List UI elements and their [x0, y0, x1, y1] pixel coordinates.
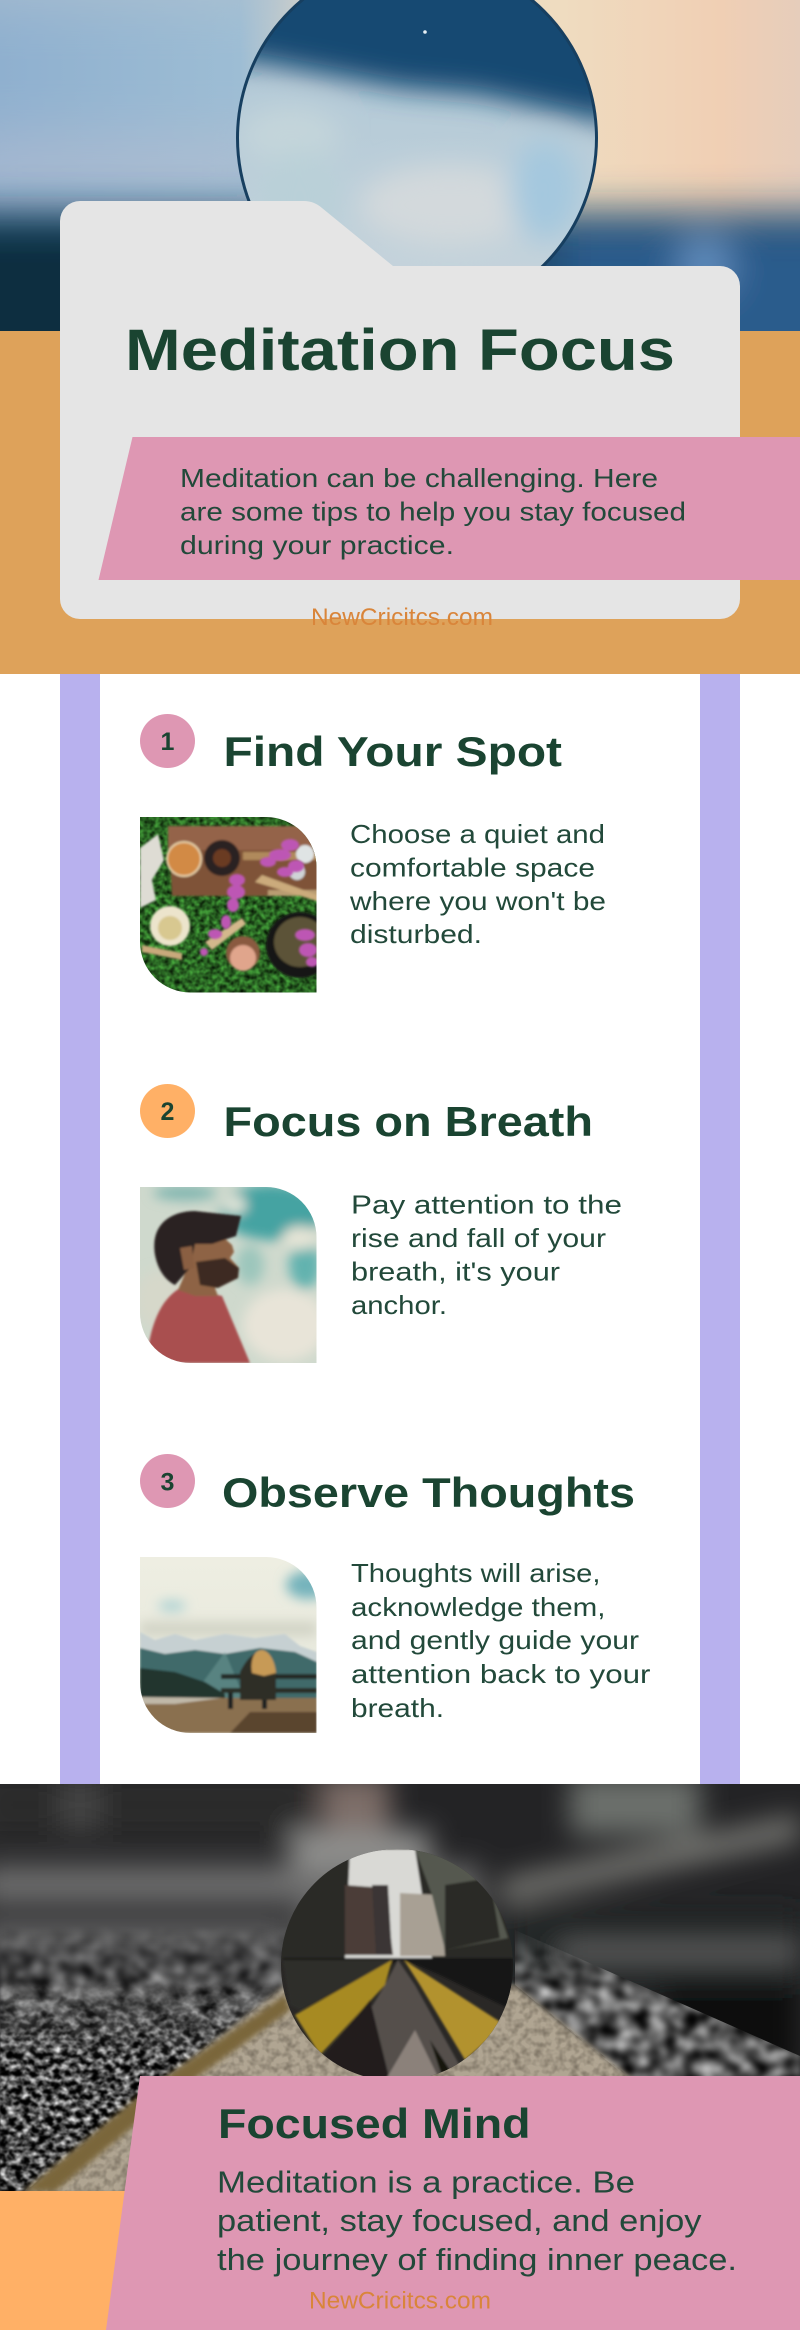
header photo: glass lens against a blurred sky: [0, 0, 800, 331]
pink blossoms: [200, 839, 318, 967]
step 2: [135, 1084, 622, 1363]
body text: breath.: [351, 1693, 444, 1723]
road stripe: [20, 1981, 634, 2191]
number badge 3: 3: [161, 1468, 174, 1496]
body text: comfortable space: [350, 852, 595, 882]
body text: acknowledge them,: [351, 1592, 606, 1622]
body text: Pay attention to the: [351, 1190, 622, 1220]
heading: Focus on Breath: Focus on Breath: [224, 1098, 593, 1145]
heading: Focused Mind: Focused Mind: [218, 2100, 530, 2147]
number badge 1: [140, 714, 195, 768]
body text: where you won't be: [349, 886, 606, 916]
watermark: NewCricitcs.com: [309, 2288, 491, 2314]
right asphalt gravel: [515, 1933, 800, 2076]
left asphalt gravel: [0, 1985, 272, 2191]
watermark: NewCricitcs.com: [311, 604, 493, 631]
body text: Choose a quiet and: [350, 819, 605, 849]
photo: herbs and bowls on grass: [140, 817, 334, 993]
closing text: [217, 2164, 737, 2277]
intro text: during your practice.: [180, 530, 454, 560]
pink intro band: [98, 437, 800, 580]
right purple bar: [700, 674, 740, 1785]
body text: [351, 1558, 651, 1723]
body text: breath, it's your: [351, 1256, 560, 1286]
folder-shaped title card: [60, 201, 740, 619]
closing text: patient, stay focused, and enjoy: [217, 2203, 702, 2238]
title: Meditation Focus: [125, 318, 675, 383]
crystal ball: [281, 1849, 513, 2085]
step 3: [140, 1454, 651, 1733]
left asphalt, soft upper band: [0, 1931, 284, 2191]
photo: man looking at the sky: [135, 1184, 327, 1363]
number badge 3: [140, 1454, 195, 1508]
body text: anchor.: [351, 1290, 447, 1320]
pink closing panel: [106, 2076, 800, 2330]
step 1: [140, 714, 606, 993]
body text: attention back to your: [351, 1659, 651, 1689]
heading: Observe Thoughts: Observe Thoughts: [222, 1469, 635, 1516]
body text: rise and fall of your: [351, 1223, 606, 1253]
body text: [349, 819, 606, 949]
number badge 1: 1: [161, 728, 175, 756]
body text: and gently guide your: [351, 1625, 639, 1655]
photo: woman on a bench facing mountains: [140, 1557, 330, 1733]
left purple bar: [60, 674, 100, 1785]
intro text: Meditation can be challenging. Here: [180, 463, 658, 493]
closing text: the journey of finding inner peace.: [217, 2242, 737, 2277]
number badge 2: [140, 1084, 195, 1138]
body text: [351, 1190, 622, 1320]
intro text: are some tips to help you stay focused: [180, 496, 686, 526]
orange header band: [0, 331, 800, 674]
heading: Find Your Spot: Find Your Spot: [224, 728, 562, 775]
body text: Thoughts will arise,: [351, 1558, 600, 1588]
body text: disturbed.: [350, 919, 482, 949]
glass lens: [236, 0, 598, 266]
intro text: [180, 463, 686, 560]
closing text: Meditation is a practice. Be: [217, 2164, 635, 2200]
orange footer corner: [0, 2190, 200, 2330]
number badge 2: 2: [161, 1098, 174, 1126]
footer photo: crystal ball on a road: [0, 1770, 800, 2210]
